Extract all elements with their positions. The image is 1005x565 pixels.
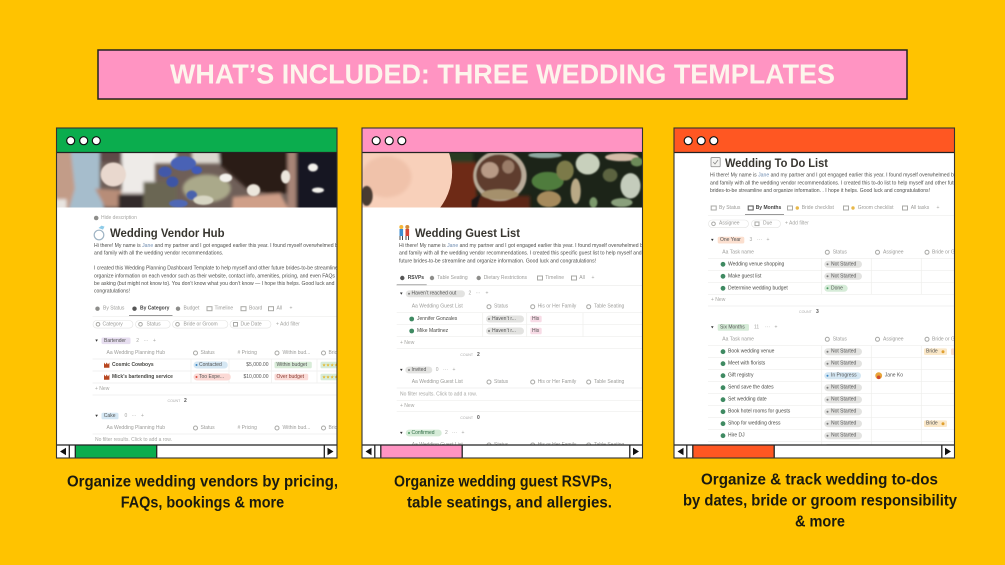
group: confirmed: His or Her Family bbox=[538, 442, 577, 448]
caption: guest list: table seatings, and allergies. bbox=[407, 494, 612, 512]
row: wedding venue shopping bbox=[721, 261, 862, 268]
row: meet with florists: Not Started bbox=[831, 361, 857, 367]
to do list page content bbox=[708, 156, 973, 451]
group: confirmed: Table Seating bbox=[594, 442, 625, 448]
filter pills: Assignee bbox=[719, 221, 740, 227]
row: make guest list: Not Started bbox=[831, 273, 857, 279]
filter pills: + Add filter bbox=[276, 321, 300, 327]
group: one year: COUNT bbox=[799, 310, 813, 314]
filter pills bbox=[93, 320, 300, 328]
group: confirmed: 2 bbox=[445, 430, 448, 436]
icon: couple bbox=[399, 225, 409, 240]
row: determine wedding budget: Determine wedding budget bbox=[728, 285, 788, 291]
group: bartender: Status bbox=[200, 350, 215, 356]
row: set wedding date: Not Started bbox=[831, 397, 857, 403]
row: book wedding venue: Not Started bbox=[831, 349, 857, 355]
group: six months: Six Months bbox=[720, 324, 745, 330]
row: cosmic cowboys bbox=[104, 362, 339, 368]
row: wedding venue shopping: Wedding venue shopping bbox=[728, 261, 785, 267]
row: book hotel rooms for guests: Book hotel rooms for guests bbox=[728, 409, 791, 415]
group: confirmed: ··· bbox=[452, 430, 457, 436]
group: one year: + bbox=[766, 237, 770, 243]
row: mike martinez bbox=[409, 328, 542, 334]
view tabs: + bbox=[592, 275, 594, 281]
row: determine wedding budget bbox=[721, 285, 848, 292]
icon: diamond ring bbox=[94, 226, 104, 240]
row: gift registry bbox=[721, 372, 903, 379]
row: cosmic cowboys: $5,000.00 bbox=[246, 362, 269, 368]
title banner: WHAT’S INCLUDED: THREE WEDDING TEMPLATES bbox=[170, 58, 835, 90]
caption: to do list bbox=[683, 472, 957, 530]
scrollbar: pink bbox=[362, 445, 642, 458]
cover photo: table setting bbox=[362, 153, 642, 208]
group: invited: + bbox=[452, 367, 456, 373]
view tabs: RSVPs bbox=[408, 275, 424, 281]
title banner bbox=[98, 50, 907, 99]
window title bar: orange bbox=[674, 128, 954, 152]
group: one year: 3 bbox=[816, 309, 819, 315]
row: shop for wedding dress: Not Started bbox=[831, 421, 857, 427]
row: make guest list bbox=[721, 273, 862, 280]
hide description: Hide description bbox=[101, 215, 137, 221]
group: one year: 3 bbox=[750, 237, 752, 243]
group: cake: Cake bbox=[104, 413, 116, 419]
view tabs: Bride checklist bbox=[802, 205, 835, 211]
group: one year: One Year bbox=[720, 237, 741, 243]
group: bartender: COUNT bbox=[168, 399, 181, 403]
group: confirmed: Status bbox=[494, 442, 509, 448]
filter pills: Category bbox=[102, 321, 123, 327]
group: invited: Invited bbox=[412, 367, 426, 373]
filter pills: Due bbox=[763, 221, 772, 227]
panel: wedding vendor hub window bbox=[53, 128, 361, 458]
view tabs: All bbox=[276, 306, 282, 312]
group: invited: Aa Wedding Guest List bbox=[412, 379, 463, 385]
intro paragraph: be asking (but might not know to). You don’t know what you don’t know — I hope this helps. Good luck and bbox=[94, 281, 335, 287]
page heading: Wedding Vendor Hub bbox=[110, 226, 224, 240]
group: one year: ··· bbox=[757, 237, 762, 243]
row: meet with florists bbox=[721, 360, 862, 367]
row: set wedding date bbox=[721, 396, 862, 403]
intro paragraph: Hi there! My name is Jane and my partner and I got engaged earlier this year. I found myself overwhelmed by friends bbox=[710, 172, 973, 178]
group: invited: No filter results. Click to add a row. bbox=[400, 391, 477, 397]
group: six months: 11 bbox=[754, 324, 759, 330]
row: send save the dates bbox=[721, 384, 862, 391]
group: confirmed bbox=[400, 430, 624, 444]
view tabs bbox=[708, 205, 954, 215]
group: cake bbox=[92, 413, 340, 443]
group: haven't reached out: + bbox=[486, 291, 488, 297]
row: mike martinez: Mike Martinez bbox=[417, 328, 449, 334]
row: hire dj: Hire DJ bbox=[728, 433, 745, 439]
row: mike martinez: His bbox=[532, 328, 540, 334]
group: haven't reached out: 2 bbox=[477, 352, 480, 358]
intro paragraph: brides-to-be streamline and organize information. . I hope it helps. Good luck and congratulations! bbox=[710, 188, 930, 194]
row: book wedding venue: Book wedding venue bbox=[728, 349, 775, 355]
intro paragraph: Hi there! My name is Jane and my partner and I got engaged earlier this year. I found myself overwhelmed by friends bbox=[399, 243, 662, 249]
row: shop for wedding dress bbox=[721, 420, 947, 427]
group: bartender bbox=[92, 338, 340, 404]
view tabs: Timeline bbox=[214, 306, 233, 312]
row: gift registry: In Progress bbox=[831, 373, 857, 379]
group: cake: Within bud... bbox=[282, 425, 310, 431]
group: confirmed: Aa Wedding Guest List bbox=[412, 442, 463, 448]
group: six months: Status bbox=[833, 336, 847, 342]
row: book wedding venue: Bride bbox=[926, 349, 938, 355]
group: haven't reached out: ··· bbox=[476, 291, 481, 297]
view tabs: Timeline bbox=[545, 275, 564, 281]
group: confirmed: + bbox=[462, 430, 464, 436]
caption: vendor hub: Organize wedding vendors by pricing, bbox=[67, 474, 338, 490]
row: mick's bartending service: Too Expe... bbox=[199, 374, 224, 380]
filter pills: + Add filter bbox=[785, 221, 809, 227]
group: bartender: + bbox=[153, 338, 156, 344]
intro paragraph: future brides-to-be streamline and organize information. Good luck and congratulations! bbox=[399, 258, 596, 264]
row: mike martinez: Haven’t r... bbox=[492, 328, 516, 334]
view tabs: Dietary Restrictions bbox=[484, 275, 528, 281]
group: one year bbox=[708, 237, 966, 315]
view tabs bbox=[92, 306, 336, 316]
cover photo: bridal bouquet bbox=[57, 153, 336, 208]
caption: guest list: Organize wedding guest RSVPs, bbox=[394, 474, 612, 490]
row: shop for wedding dress: Shop for wedding dress bbox=[728, 421, 781, 427]
intro paragraph: Hi there! My name is Jane and my partner and I got engaged earlier this year. I found myself overwhelmed by friends bbox=[94, 243, 357, 249]
row: cosmic cowboys: Within budget bbox=[276, 362, 308, 368]
view tabs: All tasks bbox=[911, 205, 930, 211]
intro paragraph bbox=[710, 172, 954, 193]
group: six months: Assignee bbox=[883, 336, 904, 342]
view tabs: All bbox=[579, 275, 585, 281]
group: invited bbox=[397, 367, 642, 421]
row: send save the dates: Not Started bbox=[831, 385, 857, 391]
group: invited: + New bbox=[400, 403, 415, 409]
row: determine wedding budget: Done bbox=[831, 285, 843, 291]
group: bartender: 2 bbox=[184, 398, 187, 404]
view tabs: + bbox=[936, 205, 940, 211]
group: haven't reached out: + New bbox=[400, 340, 415, 346]
scrollbar: green bbox=[56, 445, 337, 458]
group: cake: 0 bbox=[124, 413, 128, 419]
group: one year: Aa Task name bbox=[722, 249, 754, 255]
row: meet with florists: Meet with florists bbox=[728, 361, 766, 367]
intro paragraph: congratulations! bbox=[94, 289, 130, 295]
row: send save the dates: Send save the dates bbox=[728, 385, 774, 391]
group: one year: + New bbox=[711, 297, 726, 303]
view tabs bbox=[397, 275, 642, 286]
scrollbar: orange bbox=[674, 445, 954, 458]
row: jennifer gonzales: Haven’t r... bbox=[492, 316, 516, 322]
caption: to do list: & more bbox=[795, 514, 845, 530]
row: jennifer gonzales: His bbox=[532, 316, 540, 322]
row: cosmic cowboys: Cosmic Cowboys bbox=[112, 362, 154, 368]
group: haven't reached out: Haven’t reached out bbox=[412, 291, 457, 297]
caption: to do list: by dates, bride or groom responsibility bbox=[683, 492, 957, 510]
group: cake: No filter results. Click to add a row. bbox=[95, 437, 172, 443]
group: bartender: ··· bbox=[144, 338, 149, 344]
view tabs: Board bbox=[249, 306, 263, 312]
group: haven't reached out: Aa Wedding Guest List bbox=[412, 304, 463, 310]
filter pills: Due Date bbox=[240, 321, 262, 327]
row: jennifer gonzales: Jennifer Gonzales bbox=[417, 316, 458, 322]
group: haven't reached out: His or Her Family bbox=[538, 304, 577, 310]
group: bartender: 2 bbox=[136, 338, 139, 344]
group: bartender: + New bbox=[95, 386, 110, 392]
caption: vendor hub: FAQs, bookings & more bbox=[121, 494, 285, 512]
row: cosmic cowboys: ★★★★ bbox=[322, 362, 339, 368]
group: invited: Table Seating bbox=[594, 379, 625, 385]
row: hire dj: Not Started bbox=[831, 433, 857, 439]
group: confirmed: Confirmed bbox=[412, 430, 435, 436]
group: cake: Aa Wedding Planning Hub bbox=[106, 425, 165, 431]
group: cake: # Pricing bbox=[238, 425, 257, 431]
group: six months: ··· bbox=[765, 324, 770, 330]
row: wedding venue shopping: Not Started bbox=[831, 261, 857, 267]
group: one year: Status bbox=[833, 249, 847, 255]
intro paragraph bbox=[399, 243, 642, 264]
group: cake: Status bbox=[200, 425, 215, 431]
page heading: Wedding Guest List bbox=[415, 226, 520, 240]
group: invited: Status bbox=[494, 379, 509, 385]
group: six months bbox=[708, 324, 966, 451]
group: cake: + bbox=[141, 413, 144, 419]
row: book hotel rooms for guests bbox=[721, 408, 862, 415]
intro paragraph: I created this Wedding Planning Dashboard Template to help myself and other future brides-to-be streamline and bbox=[94, 266, 348, 272]
row: mick's bartending service: Over budget bbox=[276, 374, 305, 380]
row: gift registry: Jane Ko bbox=[885, 373, 903, 379]
group: bartender: Aa Wedding Planning Hub bbox=[106, 350, 165, 356]
group: bartender: Bartender bbox=[104, 338, 126, 344]
view tabs: By Status bbox=[719, 205, 741, 211]
window title bar: green bbox=[56, 128, 337, 152]
group: cake: Bride bbox=[328, 425, 340, 431]
group: haven't reached out: Table Seating bbox=[594, 304, 625, 310]
group: haven't reached out bbox=[397, 290, 642, 358]
row: mick's bartending service bbox=[104, 374, 339, 380]
view tabs: By Status bbox=[103, 306, 125, 312]
icon: checkbox bbox=[711, 158, 720, 167]
filter pills bbox=[708, 220, 809, 228]
view tabs: Groom checklist bbox=[858, 205, 894, 211]
row: jennifer gonzales bbox=[409, 316, 542, 322]
row: book wedding venue bbox=[721, 348, 959, 355]
row: mick's bartending service: ★★★★ bbox=[322, 374, 339, 380]
row: cosmic cowboys: Contacted bbox=[199, 362, 222, 368]
intro paragraph: and family with all the wedding vendor recommendations. I created this specific guest list to help myself and other bbox=[399, 251, 655, 257]
group: bartender: Bride bbox=[328, 350, 340, 356]
group: haven't reached out: 2 bbox=[468, 291, 472, 297]
view tabs: By Category bbox=[140, 306, 170, 312]
panel: wedding to do list window bbox=[674, 128, 973, 458]
view tabs: Budget bbox=[184, 306, 200, 312]
group: haven't reached out: Status bbox=[494, 304, 509, 310]
guest list page content bbox=[362, 153, 642, 444]
row: set wedding date: Set wedding date bbox=[728, 397, 767, 403]
intro paragraph: and family with all the wedding vendor recommendations. bbox=[94, 251, 223, 257]
row: shop for wedding dress: Bride bbox=[926, 421, 938, 427]
row: hire dj bbox=[721, 432, 862, 439]
group: invited: COUNT bbox=[460, 416, 474, 420]
row: gift registry: Gift registry bbox=[728, 373, 754, 379]
view tabs: Table Seating bbox=[437, 275, 468, 281]
row: make guest list: Make guest list bbox=[728, 273, 762, 279]
group: one year: Assignee bbox=[883, 249, 904, 255]
group: cake: ··· bbox=[132, 413, 137, 419]
row: book hotel rooms for guests: Not Started bbox=[831, 409, 857, 415]
group: one year: Bride or Groom bbox=[932, 249, 966, 255]
group: six months: Aa Task name bbox=[722, 336, 754, 342]
view tabs: + bbox=[290, 306, 292, 312]
intro paragraph: organize information on each vendor such as their website, contact info, amenities, pricing, and even FAQs you should bbox=[94, 273, 361, 279]
intro paragraph bbox=[94, 243, 336, 294]
window title bar: pink bbox=[362, 128, 642, 152]
group: invited: 0 bbox=[436, 367, 439, 373]
filter pills: Bride or Groom bbox=[184, 321, 218, 327]
panel: wedding guest list window bbox=[361, 127, 644, 459]
caption: vendor hub bbox=[67, 474, 338, 512]
group: bartender: # Pricing bbox=[238, 350, 257, 356]
filter pills: Status bbox=[146, 321, 161, 327]
group: six months: + bbox=[774, 324, 778, 330]
caption: guest list bbox=[394, 474, 612, 512]
caption: to do list: Organize & track wedding to-dos bbox=[701, 472, 938, 488]
view tabs: By Months bbox=[756, 205, 781, 211]
page heading: Wedding To Do List bbox=[725, 156, 828, 170]
row: mick's bartending service: $10,000.00 bbox=[243, 374, 269, 380]
group: invited: His or Her Family bbox=[538, 379, 577, 385]
group: six months: Bride or Groom bbox=[932, 336, 966, 342]
group: invited: 0 bbox=[477, 415, 480, 421]
intro paragraph: and family with all the wedding vendor recommendations. I created this to-do list to help myself and other future bbox=[710, 180, 961, 186]
group: bartender: Within bud... bbox=[282, 350, 310, 356]
group: invited: ··· bbox=[443, 367, 448, 373]
vendor hub page content bbox=[57, 153, 336, 441]
group: haven't reached out: COUNT bbox=[460, 353, 474, 357]
row: mick's bartending service: Mick’s bartending service bbox=[112, 374, 173, 380]
